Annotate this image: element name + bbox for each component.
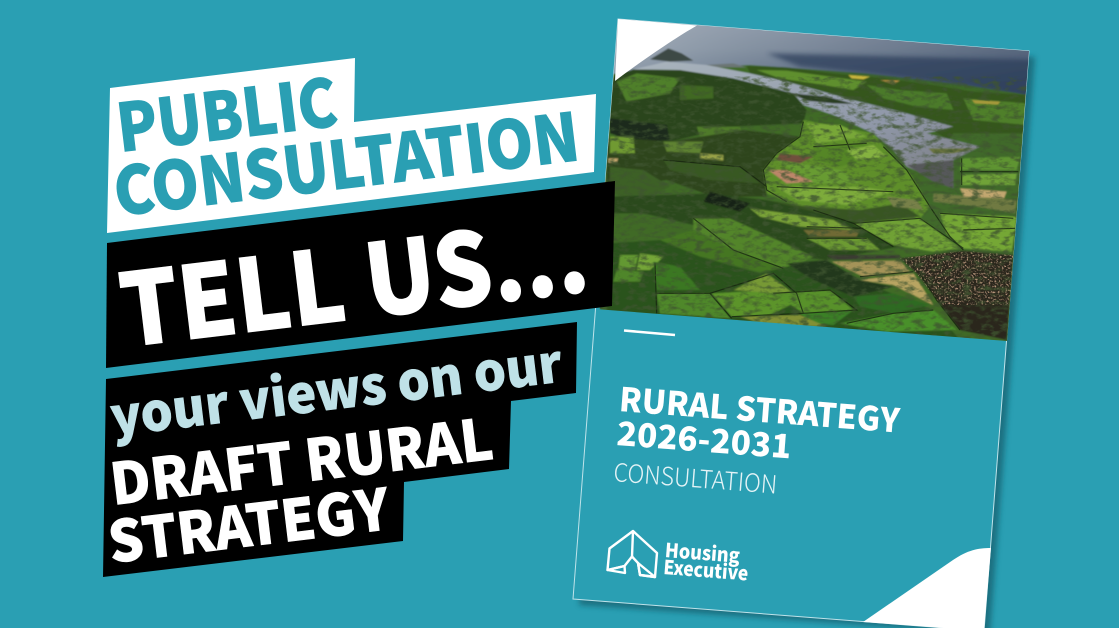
town houses: [900, 251, 1013, 305]
heading: consultation: CONSULTATION: [108, 84, 584, 236]
cover years: 2026-2031: [615, 407, 793, 468]
heading: public: PUBLIC: [111, 50, 342, 172]
central bright: [763, 120, 930, 223]
town: [900, 251, 1013, 340]
panel: views banner: [103, 322, 577, 580]
cover title: RURAL STRATEGY: [618, 373, 902, 443]
bottom: [607, 240, 963, 343]
cover photo corner cut: [615, 19, 697, 81]
right bank: [950, 133, 1022, 144]
photo texture: [600, 77, 1040, 350]
cover short rule: [624, 330, 675, 335]
far shore: [747, 66, 1027, 143]
logo wordmark: Housing: [664, 534, 741, 569]
panel: tell us banner: [106, 175, 615, 376]
cover drop shadow: [579, 25, 1035, 628]
panel: public consultation banner: [107, 50, 596, 236]
cover sheet: [573, 19, 1029, 628]
cover subtitle: CONSULTATION: [612, 453, 779, 502]
upper left: [610, 68, 807, 142]
panel: report cover: [573, 10, 1040, 628]
cover bottom-right white corner: [863, 548, 991, 628]
lower: [607, 193, 900, 260]
text: strategy: STRATEGY: [103, 464, 394, 580]
hedgerows: [655, 122, 1018, 330]
icon: housing executive logo: [608, 531, 657, 577]
logo wordmark: Executive: [663, 551, 750, 587]
heading: tell us: TELL US...: [111, 175, 595, 376]
central left, shadowed: [607, 130, 800, 197]
text: draft rural: DRAFT RURAL: [105, 394, 497, 522]
cover aerial photograph: [600, 10, 1040, 350]
logo wordmark: [663, 534, 750, 587]
text: your views on our: your views on our: [106, 322, 566, 451]
water: [634, 61, 980, 171]
